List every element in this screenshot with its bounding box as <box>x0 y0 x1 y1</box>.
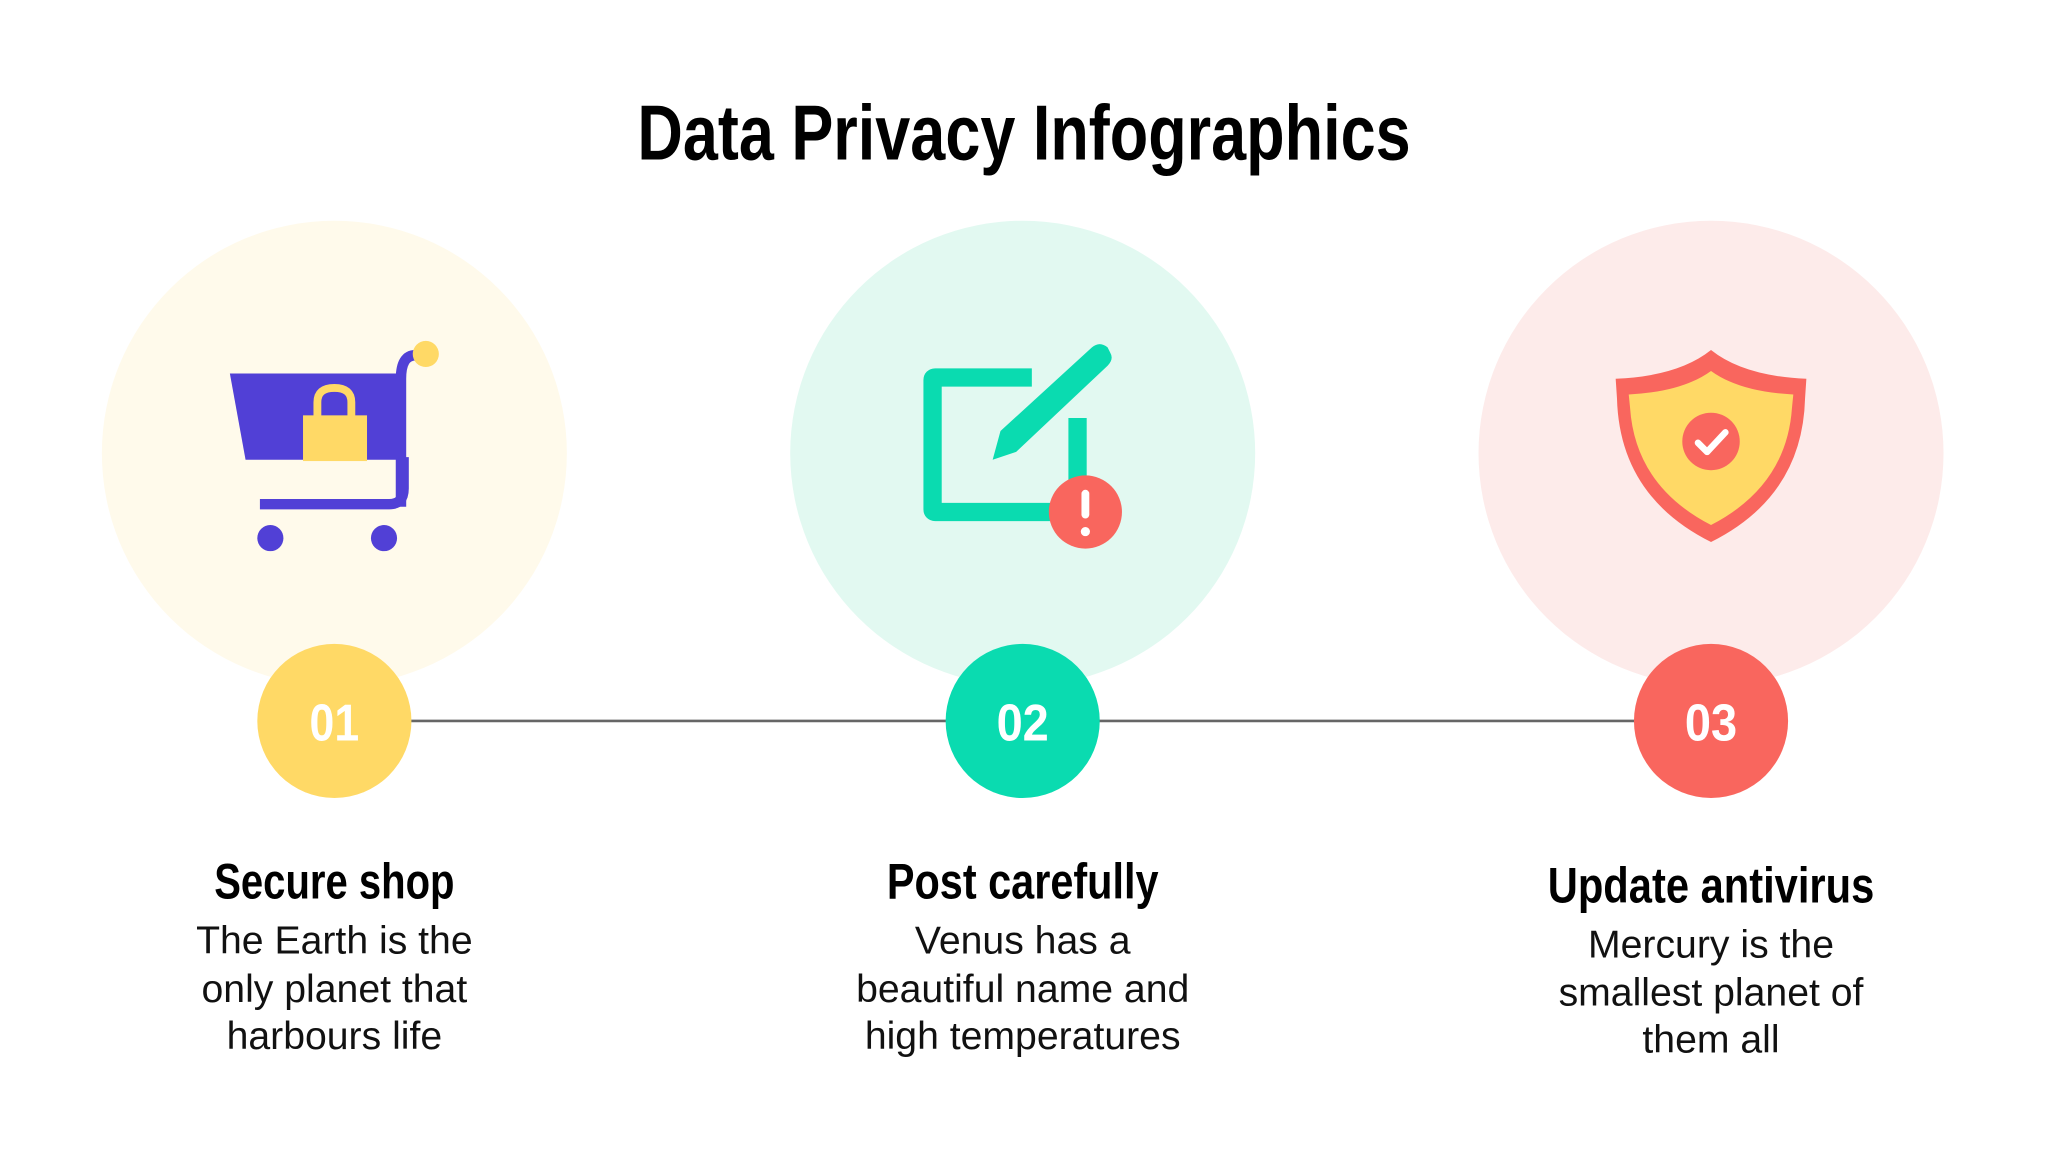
step 1 text: Secure shop <box>214 854 455 910</box>
background circle 1 <box>102 221 567 686</box>
number badge 01 <box>257 644 411 798</box>
step 2 text: Venus has a <box>915 919 1131 962</box>
step 3 text <box>1548 858 1874 1062</box>
step 2 text: beautiful name and <box>856 968 1189 1011</box>
timeline line <box>392 720 1646 722</box>
background circle 3 <box>1479 221 1944 686</box>
step 3 text: Mercury is the <box>1588 923 1834 966</box>
icon: edit with alert <box>933 344 1122 549</box>
step 3 text: Update antivirus <box>1548 858 1874 914</box>
number badge 01: 01 <box>310 695 359 753</box>
background circle 2 <box>790 221 1255 686</box>
step 1 text: only planet that <box>202 968 467 1011</box>
number badge 02: 02 <box>997 695 1049 753</box>
step 2 text <box>856 854 1189 1058</box>
step 2 text: Post carefully <box>887 854 1159 910</box>
step 1 text <box>196 854 473 1058</box>
step 1 text: harbours life <box>227 1015 442 1058</box>
step 3 text: them all <box>1642 1019 1780 1062</box>
step 1 text: The Earth is the <box>196 919 473 962</box>
title: Data Privacy Infographics <box>637 88 1411 176</box>
step 3 text: smallest planet of <box>1559 972 1864 1015</box>
number badge 02 <box>946 644 1100 798</box>
icon: shield with check <box>1616 350 1806 542</box>
number badge 03: 03 <box>1685 695 1737 753</box>
number badge 03 <box>1634 644 1788 798</box>
icon: shopping cart with lock <box>230 341 439 551</box>
step 2 text: high temperatures <box>865 1015 1181 1058</box>
